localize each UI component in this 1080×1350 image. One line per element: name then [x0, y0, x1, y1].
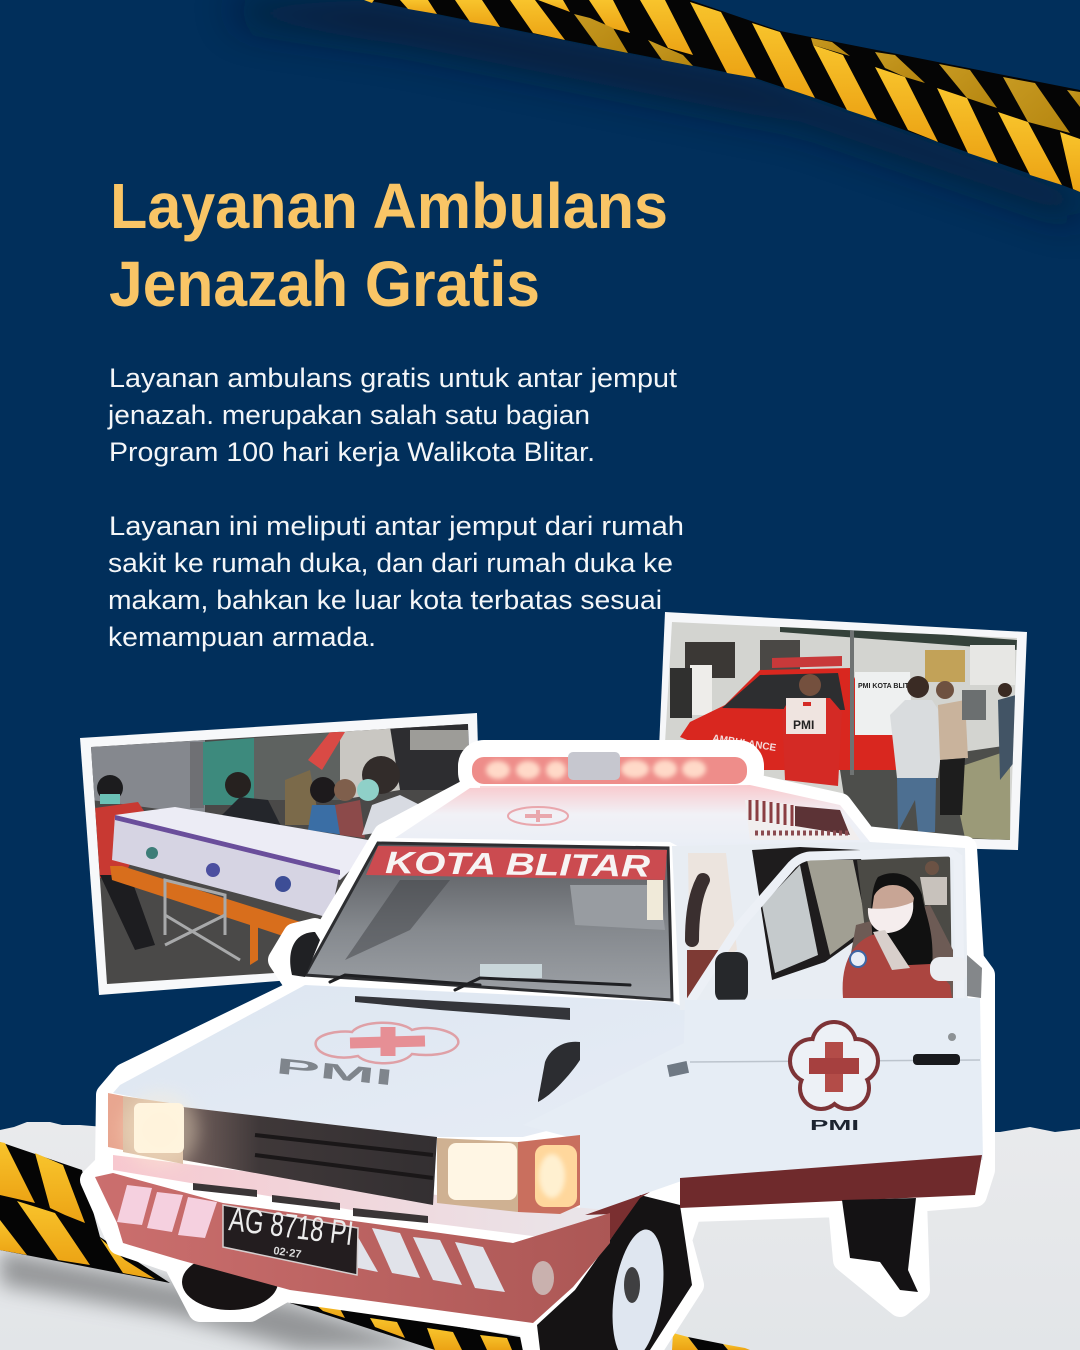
bottom torn paper [0, 1122, 1080, 1350]
door window view [843, 856, 953, 998]
body text: sakit ke rumah duka, dan dari rumah duka ke [108, 548, 673, 578]
roof vents [745, 800, 860, 840]
windshield [305, 843, 672, 1000]
roof [395, 785, 870, 850]
group of mourners [285, 770, 365, 838]
door panel [680, 998, 983, 1178]
licence plate: AG 8718 PI [227, 1200, 355, 1253]
body text: Program 100 hari kerja Walikota Blitar. [109, 437, 595, 467]
hood emblem: PMI [274, 1023, 458, 1090]
cab interior behind door [687, 853, 737, 1000]
fender [523, 1040, 690, 1215]
photo: coffin and stretcher [80, 713, 484, 995]
body text: jenazah. merupakan salah satu bagian [107, 400, 590, 430]
man in black shirt [222, 772, 282, 828]
stretcher [110, 866, 310, 965]
body text: kemampuan armada. [108, 622, 376, 652]
fender badge [667, 1061, 689, 1077]
man with mask [357, 756, 420, 835]
red ambulance [680, 656, 919, 770]
lower white strip [113, 1155, 610, 1240]
woman in PMI uniform [843, 873, 982, 998]
headlight left [108, 1092, 198, 1168]
hood mirror [538, 1042, 580, 1102]
rear tyre [182, 1254, 278, 1310]
licence plate: 02·27 [273, 1245, 302, 1261]
red ambulance: PMI KOTA BLITAR [858, 683, 919, 690]
emblem on roof [508, 807, 568, 825]
coffin [112, 807, 380, 918]
body text [107, 363, 684, 652]
cabin side panel [672, 842, 968, 1010]
body text: makam, bahkan ke luar kota terbatas sesuai [108, 585, 662, 615]
left wing mirror [290, 932, 320, 977]
body text: Layanan ambulans gratis untuk antar jemput [109, 363, 678, 393]
headlight right [437, 1135, 580, 1214]
hood emblem: PMI: PMI [274, 1053, 394, 1090]
man in red vest: PMI [793, 718, 814, 732]
man in red vest [782, 674, 842, 786]
windshield banner text: KOTA BLITAR [385, 845, 651, 884]
bumper [95, 1173, 610, 1323]
photo: ambulance and crew [655, 612, 1027, 850]
PMI door logo: PMI [810, 1117, 859, 1134]
title: Jenazah Gratis [109, 248, 540, 320]
PMI door logo [791, 1023, 877, 1134]
bumper trim [193, 1183, 428, 1223]
bystanders [962, 683, 1016, 780]
top caution tape [230, 0, 1080, 222]
bottom caution tape [0, 1142, 750, 1350]
door handle [913, 1054, 960, 1065]
door red strip [680, 1155, 982, 1208]
emergency light bar [472, 752, 750, 796]
hood [113, 985, 690, 1137]
white sticker outline [92, 752, 983, 1350]
wipers and cowl [330, 975, 630, 1020]
front wheel [537, 1192, 692, 1350]
red ambulance: AMBULANCE [712, 733, 777, 754]
title: Layanan Ambulans [110, 170, 668, 242]
men in shirts [890, 676, 968, 832]
woman's legs [842, 1198, 918, 1292]
grille [183, 1107, 437, 1205]
person in red [95, 775, 155, 950]
side mirror on door [705, 952, 748, 1015]
licence plate [223, 1200, 358, 1275]
title [109, 170, 668, 320]
door frame [690, 852, 960, 1002]
ambulance sticker [92, 752, 983, 1350]
body text: Layanan ini meliputi antar jemput dari rumah [109, 511, 684, 541]
rear side windows [752, 847, 870, 980]
